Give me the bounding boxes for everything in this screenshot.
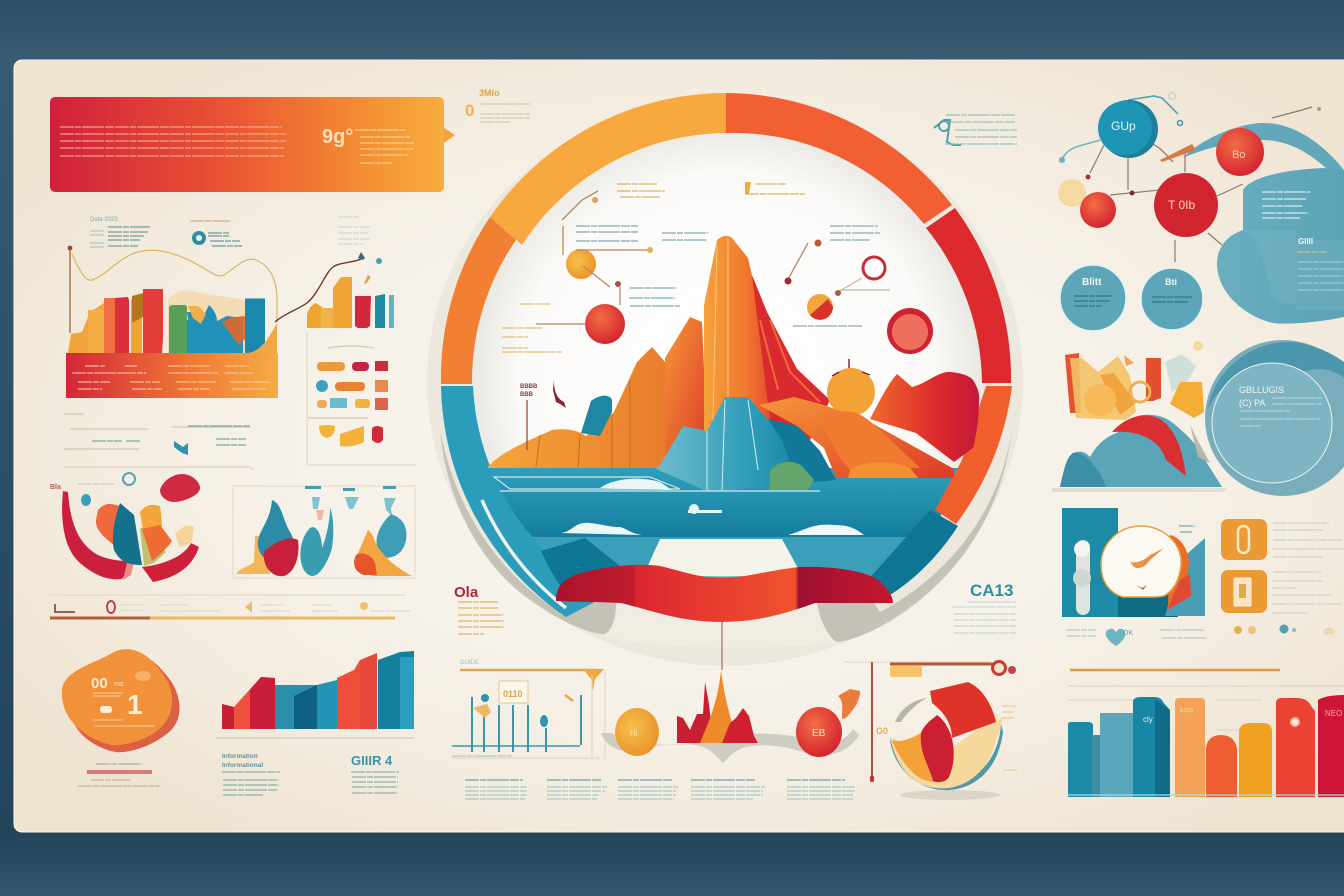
- ring segment red-orange top: [726, 93, 952, 224]
- orange ball: [615, 708, 659, 756]
- illustration: yellow and red shapes: [1065, 341, 1204, 420]
- ball: orange split: [807, 294, 833, 320]
- chart: gauge panel: [1062, 508, 1334, 646]
- teal node: [1100, 100, 1158, 158]
- lower shadow band: [440, 430, 1012, 642]
- ball: yellow: [566, 249, 596, 279]
- ring segment red: [926, 208, 1011, 383]
- chart: pie on right: G0: [876, 726, 888, 736]
- chart: network of nodes: Bo: [1232, 149, 1245, 161]
- chart: right bar chart: tops: [1180, 707, 1194, 714]
- chart: peaks with two balls: [601, 670, 859, 763]
- ring dark teal right: [868, 510, 958, 602]
- circle heading: GBLLUGIS: [1239, 385, 1284, 395]
- panel: small teal circle left: [1060, 265, 1126, 331]
- chart: gauge panel: db: [1324, 626, 1334, 636]
- callout: orange blob: ms: [114, 681, 124, 688]
- chart: right bar chart: [1068, 670, 1344, 797]
- text block: under chart right: [351, 753, 399, 793]
- chart: network of nodes: T 0Ib: [1168, 198, 1195, 212]
- chart: peaks with two balls: Hi: [630, 729, 638, 738]
- text block: under chart left: [222, 753, 280, 795]
- text block: chart notes right: [338, 217, 370, 244]
- text block: centre right note: [952, 581, 1016, 633]
- panel: headline banner: [50, 97, 455, 192]
- mountains: [487, 236, 979, 492]
- red ball: [796, 707, 842, 757]
- clouds and waves: [494, 477, 820, 491]
- disc shadow: [427, 98, 1023, 666]
- text block: chart notes left: Data 2023: [90, 217, 118, 223]
- ring annotation text: BBB: [520, 392, 534, 398]
- chart: peaks with two balls: EB: [812, 728, 826, 739]
- bridge opening: [645, 539, 800, 576]
- text block: centre left note: Ola: [454, 584, 479, 601]
- text block: centre left note: [454, 584, 504, 634]
- icon: check wave: [174, 441, 188, 455]
- panel: small teal circle right: [1141, 268, 1203, 330]
- gauge dial: [1101, 526, 1181, 597]
- ball: red with link: [585, 304, 625, 344]
- chart: small rising bars: [275, 252, 394, 328]
- text block: centre right note: CA13: [970, 581, 1013, 600]
- banner number: 9g°: [322, 126, 353, 148]
- ring annotation text: [502, 182, 880, 398]
- callout: orange blob: [62, 649, 180, 752]
- chart: gauge panel: OK: [1123, 630, 1133, 637]
- red node small: [1080, 192, 1116, 228]
- chart: abstract donut: [50, 473, 200, 582]
- banner text block: [60, 127, 286, 156]
- red caption strip: [66, 353, 278, 398]
- text block: under chart left: Information: [222, 753, 258, 760]
- icon: chat badge with note: [190, 221, 242, 246]
- chart: lollipop panel: GUIDE: [460, 660, 479, 666]
- text block: top right label: [934, 115, 1017, 145]
- panel: legend list: [307, 332, 416, 465]
- ribbon stem: [721, 622, 723, 670]
- icon: orange clip tile: [1221, 519, 1267, 560]
- blob number: 00: [91, 675, 108, 692]
- text block: top centre label: [465, 88, 530, 122]
- panel: small teal circle right: Bti: [1165, 277, 1177, 287]
- text block: under chart right: GIIIR 4: [351, 753, 393, 768]
- text columns: bottom centre: [465, 780, 855, 799]
- panel: teal speech blob: Gllll: [1298, 237, 1313, 246]
- panel: teal speech blob: [1183, 123, 1344, 324]
- connector lines: [536, 191, 890, 324]
- lollipop label: 0110: [503, 689, 523, 699]
- cream hill: [168, 290, 262, 353]
- line trend: [72, 250, 277, 322]
- ribbon: [556, 565, 893, 622]
- chart: lollipop panel: [452, 660, 605, 758]
- icon: heart: [1106, 629, 1125, 646]
- blob big digit: 1: [127, 689, 143, 720]
- text block: top centre label: 3Mlo: [479, 88, 500, 98]
- chart: vases: [233, 486, 415, 578]
- icon: orange battery tile: [1221, 570, 1267, 613]
- chart: main bar chart: [66, 246, 278, 398]
- text block: lower left notes: [64, 414, 254, 470]
- panel: large teal circle: (C) PA: [1239, 398, 1265, 408]
- chart: abstract donut: Bla: [50, 484, 61, 491]
- orange area tail: [246, 323, 277, 353]
- blob text: [1262, 192, 1310, 218]
- ring inner white: [468, 122, 984, 638]
- text block: right of tiles: [1272, 523, 1344, 613]
- ball: big red right: [887, 308, 933, 354]
- banner side note: [355, 130, 415, 163]
- text block: under chart left: Informational: [222, 762, 263, 769]
- red node top: [1216, 128, 1264, 176]
- panel: large teal circle: [1205, 340, 1344, 496]
- chart: area bars: [216, 651, 414, 738]
- illustration: teal hills: [1052, 415, 1227, 492]
- ring segment orange right: [935, 386, 1012, 524]
- text block: legend row: [50, 595, 410, 618]
- ball: ring icon: [863, 257, 885, 279]
- bar labels: cly: [1143, 715, 1153, 724]
- sea: [490, 468, 958, 578]
- panel: small teal circle left: Blitt: [1082, 277, 1102, 288]
- chart: network of nodes: GUp: [1111, 119, 1136, 133]
- text block: chart notes left: [90, 217, 150, 247]
- ring annotation text: BBBB: [520, 384, 538, 390]
- chart: pie on right: [838, 662, 1017, 800]
- chart: right bar chart: NEO: [1325, 709, 1342, 718]
- ring segment teal: [441, 386, 606, 617]
- ring segment orange left: [441, 217, 516, 384]
- chart: network of nodes: [1058, 92, 1321, 262]
- ring segment yellow: [490, 93, 726, 245]
- chart: central ring illustration: [427, 93, 1023, 670]
- text block: blob caption: [78, 764, 160, 786]
- red node centre: [1154, 173, 1218, 237]
- text block: top centre label: 0: [465, 101, 474, 120]
